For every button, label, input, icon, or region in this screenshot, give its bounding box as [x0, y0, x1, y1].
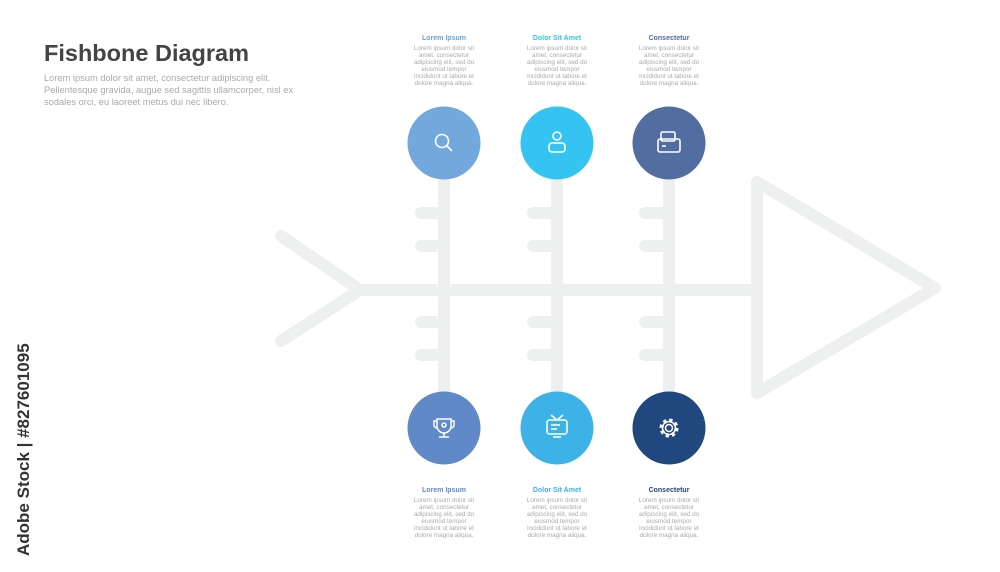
intro text: Lorem ipsum dolor sit amet, consectetur adipiscing elit. [44, 73, 270, 83]
circle: folder [632, 106, 706, 180]
circle: tv [520, 392, 594, 464]
bottom text blocks: eiusmod tempor [646, 518, 692, 525]
bottom text blocks: amet, consectetur [419, 504, 469, 511]
bottom text blocks: amet, consectetur [644, 504, 694, 511]
stock watermark id: Adobe Stock | #827601095 [14, 343, 33, 556]
bottom text blocks: eiusmod tempor [534, 518, 580, 525]
bottom text blocks: incididunt ut labore et [639, 525, 699, 532]
top text blocks: incididunt ut labore et [639, 73, 699, 80]
top text blocks: incididunt ut labore et [527, 73, 587, 80]
top text blocks: incididunt ut labore et [414, 73, 474, 80]
circle: trophy [408, 392, 480, 464]
fishbone skeleton [281, 175, 935, 400]
top text blocks: amet, consectetur [644, 52, 694, 59]
top text blocks: dolore magna aliqua. [640, 80, 699, 87]
circle: user [520, 106, 594, 180]
circle: search [408, 106, 480, 180]
bottom text blocks: adipiscing elit, sed do [527, 511, 588, 518]
top text blocks: Lorem ipsum dolor sit [639, 45, 699, 52]
intro text: sodales orci, eu laoreet metus dui nec libero. [44, 97, 228, 107]
top text blocks: Dolor Sit Amet [533, 35, 582, 42]
bottom text blocks: Lorem Ipsum [422, 487, 466, 494]
top text blocks: dolore magna aliqua. [528, 80, 587, 87]
top text blocks: dolore magna aliqua. [415, 80, 474, 87]
title: Fishbone Diagram [44, 40, 249, 66]
top text blocks: adipiscing elit, sed do [527, 59, 588, 66]
top text blocks: amet, consectetur [419, 52, 469, 59]
bottom text blocks: incididunt ut labore et [414, 525, 474, 532]
intro text [44, 73, 293, 107]
top text blocks: Lorem Ipsum [422, 35, 466, 42]
top text blocks: eiusmod tempor [534, 66, 580, 73]
bottom text blocks: adipiscing elit, sed do [639, 511, 700, 518]
top text blocks [414, 35, 700, 87]
bottom text blocks: Lorem ipsum dolor sit [527, 497, 587, 504]
top text blocks: adipiscing elit, sed do [414, 59, 475, 66]
bottom text blocks: incididunt ut labore et [527, 525, 587, 532]
bottom text blocks: adipiscing elit, sed do [414, 511, 475, 518]
top text blocks: Consectetur [649, 35, 690, 42]
top text blocks: Lorem ipsum dolor sit [414, 45, 474, 52]
top text blocks: Lorem ipsum dolor sit [527, 45, 587, 52]
top text blocks: amet, consectetur [532, 52, 582, 59]
bottom text blocks: Lorem ipsum dolor sit [639, 497, 699, 504]
top text blocks: eiusmod tempor [421, 66, 467, 73]
circle: gear [632, 392, 706, 464]
bottom text blocks: eiusmod tempor [421, 518, 467, 525]
top text blocks: adipiscing elit, sed do [639, 59, 700, 66]
intro text: Pellentesque gravida, augue sed sagittis ullamcorper, nisl ex [44, 85, 293, 95]
bottom text blocks: Consectetur [649, 487, 690, 494]
bottom text blocks: dolore magna aliqua. [640, 532, 699, 539]
bottom text blocks [414, 487, 700, 539]
bottom text blocks: dolore magna aliqua. [528, 532, 587, 539]
bottom text blocks: Lorem ipsum dolor sit [414, 497, 474, 504]
top text blocks: eiusmod tempor [646, 66, 692, 73]
bottom text blocks: dolore magna aliqua. [415, 532, 474, 539]
bottom text blocks: amet, consectetur [532, 504, 582, 511]
bottom text blocks: Dolor Sit Amet [533, 487, 582, 494]
